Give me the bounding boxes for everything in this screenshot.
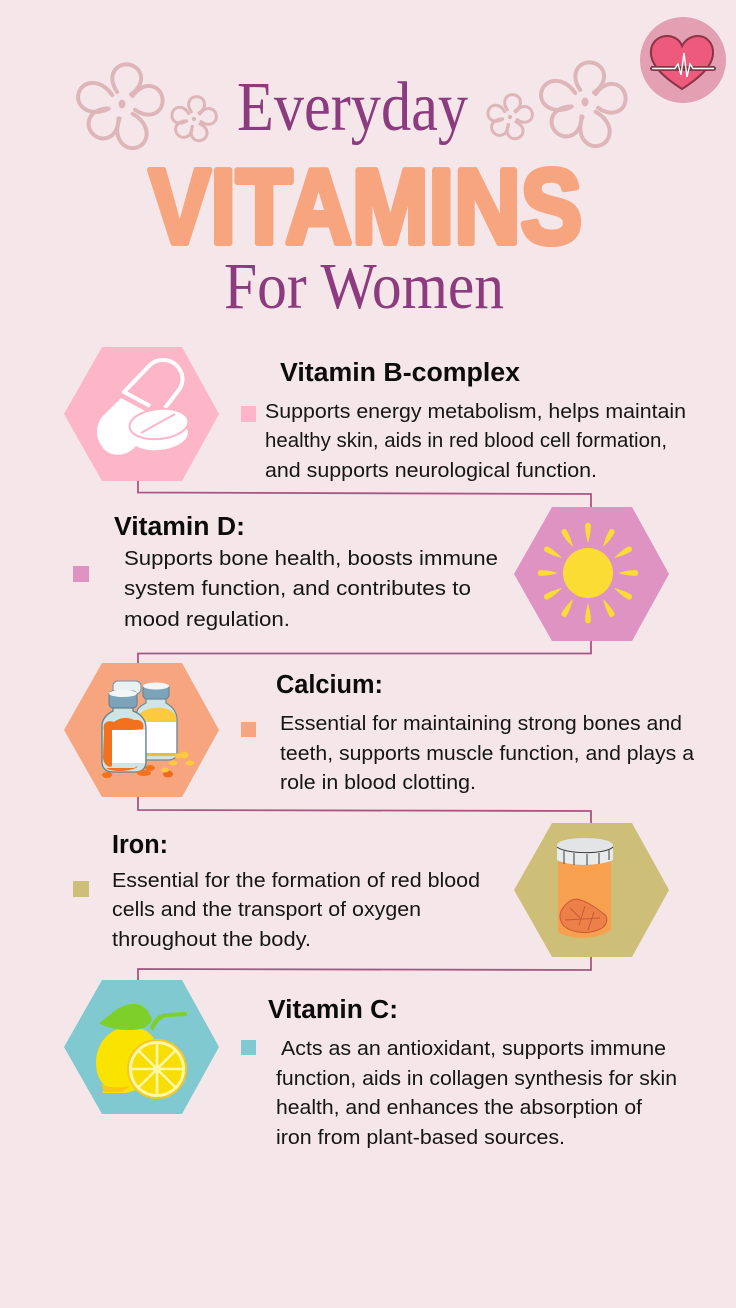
description: mood regulation. bbox=[124, 609, 290, 631]
connector: Iron to Vitamin C bbox=[138, 957, 591, 980]
description: Supports energy metabolism, helps maintain bbox=[265, 401, 686, 423]
heading: Calcium: bbox=[276, 671, 383, 699]
hexagon: pink bbox=[64, 347, 219, 481]
description: throughout the body. bbox=[112, 929, 311, 951]
icon: small flower right bbox=[486, 93, 534, 141]
icon: large flower left bbox=[75, 62, 165, 152]
panel: Iron bbox=[73, 823, 669, 957]
icon: supplement bottles bbox=[102, 681, 194, 778]
description: Acts as an antioxidant, supports immune bbox=[281, 1038, 666, 1060]
description: system function, and contributes to bbox=[124, 578, 471, 600]
icon: capsule and tablet bbox=[97, 360, 190, 455]
description bbox=[265, 401, 686, 482]
bullet bbox=[241, 722, 256, 737]
bullet bbox=[73, 566, 89, 582]
panel: Calcium bbox=[64, 663, 695, 797]
hexagon: orchid bbox=[514, 507, 669, 641]
connector: B-complex to D bbox=[138, 481, 591, 507]
icon: small flower left bbox=[170, 95, 218, 143]
description bbox=[276, 1038, 677, 1149]
description: role in blood clotting. bbox=[280, 772, 476, 794]
panel: Vitamin D bbox=[73, 507, 669, 641]
description: and supports neurological function. bbox=[265, 460, 597, 482]
hexagon: salmon bbox=[64, 663, 219, 797]
icon: sun bbox=[538, 523, 638, 623]
description: Essential for maintaining strong bones and bbox=[280, 713, 682, 735]
description: teeth, supports muscle function, and plays a bbox=[280, 743, 695, 765]
title: For Women: For Women bbox=[224, 250, 504, 323]
title: VITAMINS: VITAMINS bbox=[149, 148, 582, 266]
description: Essential for the formation of red blood bbox=[112, 870, 480, 892]
description bbox=[112, 870, 480, 951]
icon: lemon bbox=[96, 1004, 187, 1099]
panel: Vitamin B-complex bbox=[64, 347, 686, 482]
description bbox=[280, 713, 695, 794]
heading: Vitamin D: bbox=[114, 513, 245, 541]
bullet bbox=[241, 1040, 256, 1055]
connector: Calcium to Iron bbox=[138, 797, 591, 823]
icon: large flower right bbox=[538, 60, 628, 150]
title: Everyday: Everyday bbox=[237, 69, 468, 146]
heading: Iron: bbox=[112, 831, 168, 859]
description: Supports bone health, boosts immune bbox=[124, 548, 498, 570]
connector: D to Calcium bbox=[138, 641, 591, 663]
description: iron from plant-based sources. bbox=[276, 1127, 565, 1149]
bullet bbox=[241, 406, 256, 422]
panel: Vitamin C bbox=[64, 980, 677, 1149]
bullet bbox=[73, 881, 89, 897]
heading: Vitamin B-complex bbox=[280, 359, 520, 387]
hexagon: teal bbox=[64, 980, 219, 1114]
icon: pill jar bbox=[557, 838, 613, 938]
description bbox=[124, 548, 498, 631]
description: healthy skin, aids in red blood cell formation, bbox=[265, 430, 667, 452]
icon: heart with pulse badge bbox=[640, 17, 726, 103]
description: health, and enhances the absorption of bbox=[276, 1097, 642, 1119]
description: cells and the transport of oxygen bbox=[112, 899, 421, 921]
description: function, aids in collagen synthesis for skin bbox=[276, 1068, 677, 1090]
hexagon: khaki bbox=[514, 823, 669, 957]
heading: Vitamin C: bbox=[268, 996, 398, 1024]
